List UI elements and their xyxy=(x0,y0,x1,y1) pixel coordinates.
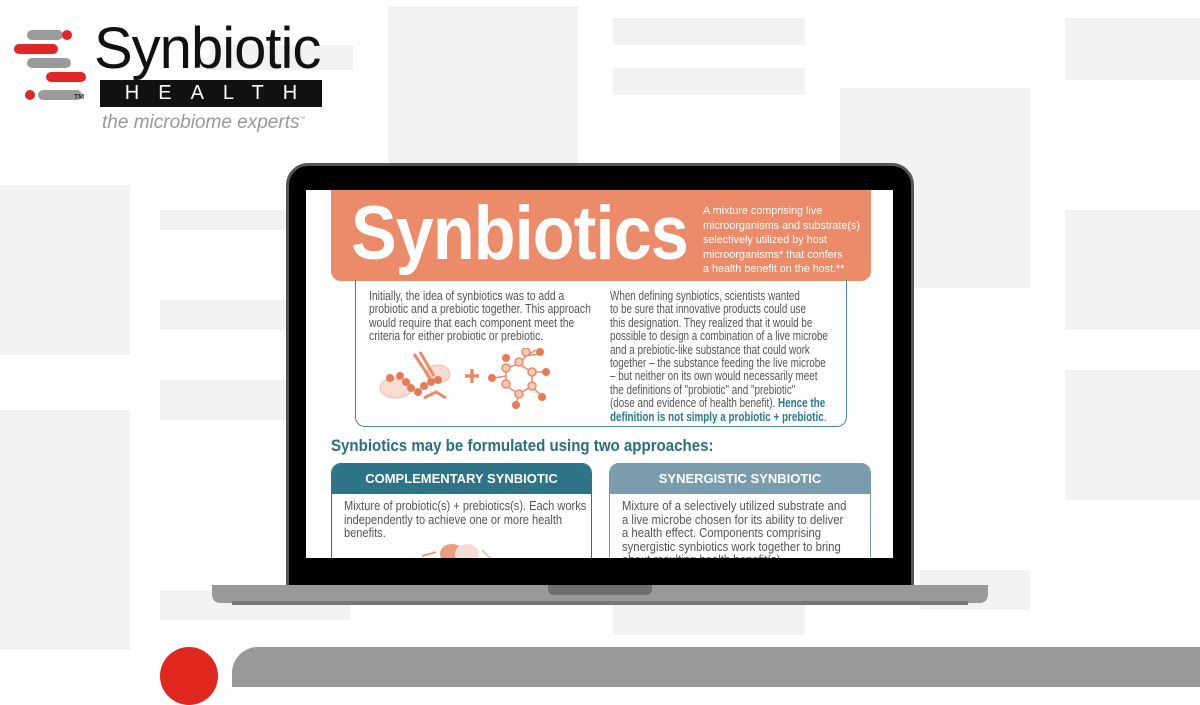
tagline: the microbiome experts™ xyxy=(102,112,305,133)
right text: to be sure that innovative products could use xyxy=(610,302,806,316)
card text: Mixture of probiotic(s) + prebiotics(s). Each works xyxy=(344,498,586,513)
left text: criteria for either probiotic or prebiotic. xyxy=(369,329,543,343)
subheading: Synbiotics may be formulated using two approaches: xyxy=(331,436,713,455)
screen xyxy=(306,190,893,558)
card header: SYNERGISTIC SYNBIOTIC xyxy=(659,471,821,486)
right text: – but neither on its own would necessarily meet xyxy=(610,369,817,383)
logo xyxy=(14,16,322,133)
left text: would require that each component meet the xyxy=(369,316,574,330)
card text: synergistic synbiotics work together to bring xyxy=(622,539,841,554)
definition: A mixture comprising live xyxy=(703,205,822,217)
intro box xyxy=(355,280,847,427)
definition: microorganisms and substrate(s) xyxy=(703,220,860,232)
bottom red circle xyxy=(160,647,218,705)
right text: possible to design a combination of a live microbe xyxy=(610,329,828,343)
right text: this designation. They realized that it would be xyxy=(610,316,812,330)
right text: the definitions of "probiotic" and "prebiotic" xyxy=(610,383,795,397)
bottom grey bar xyxy=(232,647,1200,687)
card header xyxy=(332,464,591,494)
logo wordmark: Synbiotic xyxy=(94,16,320,81)
laptop base xyxy=(212,585,988,603)
left text xyxy=(369,289,591,343)
right text xyxy=(610,289,828,424)
right text: together – the substance feeding the live microbe xyxy=(610,356,826,370)
laptop bezel xyxy=(286,163,914,588)
definition: microorganisms* that confers xyxy=(703,248,843,260)
title: Synbiotics xyxy=(351,191,688,276)
left text: Initially, the idea of synbiotics was to add a xyxy=(369,289,564,303)
logo HEALTH bar: HEALTH xyxy=(125,82,316,104)
card header: COMPLEMENTARY SYNBIOTIC xyxy=(365,471,558,486)
right text: and a prebiotic-like substance that could work xyxy=(610,343,810,357)
card: synergistic xyxy=(609,463,871,573)
right text: (dose and evidence of health benefit). Hence the xyxy=(610,396,825,410)
card text: independently to achieve one or more health xyxy=(344,512,562,527)
card text xyxy=(622,498,846,558)
definition: selectively utilized by host xyxy=(703,234,827,246)
definition xyxy=(703,205,860,275)
right text: When defining synbiotics, scientists wanted xyxy=(610,289,800,303)
card header xyxy=(610,464,870,494)
icon: capsule xyxy=(422,544,491,558)
icon: logo bars: TM xyxy=(74,94,84,101)
card text: a health effect. Components comprising xyxy=(622,525,821,540)
icon: probiotic + prebiotic xyxy=(380,348,550,409)
card text: Mixture of a selectively utilized substrate and xyxy=(622,498,846,513)
header banner xyxy=(331,190,871,281)
definition: a health benefit on the host.** xyxy=(703,263,844,275)
card: complementary xyxy=(331,463,592,573)
right text: definition is not simply a probiotic + prebiotic. xyxy=(610,410,826,424)
card text: benefits. xyxy=(344,525,386,540)
left text: probiotic and a prebiotic together. This approach xyxy=(369,302,591,316)
card text: a live microbe chosen for its ability to deliver xyxy=(622,512,843,527)
icon: logo bars xyxy=(14,30,86,101)
laptop xyxy=(212,163,988,605)
card text xyxy=(344,498,586,540)
